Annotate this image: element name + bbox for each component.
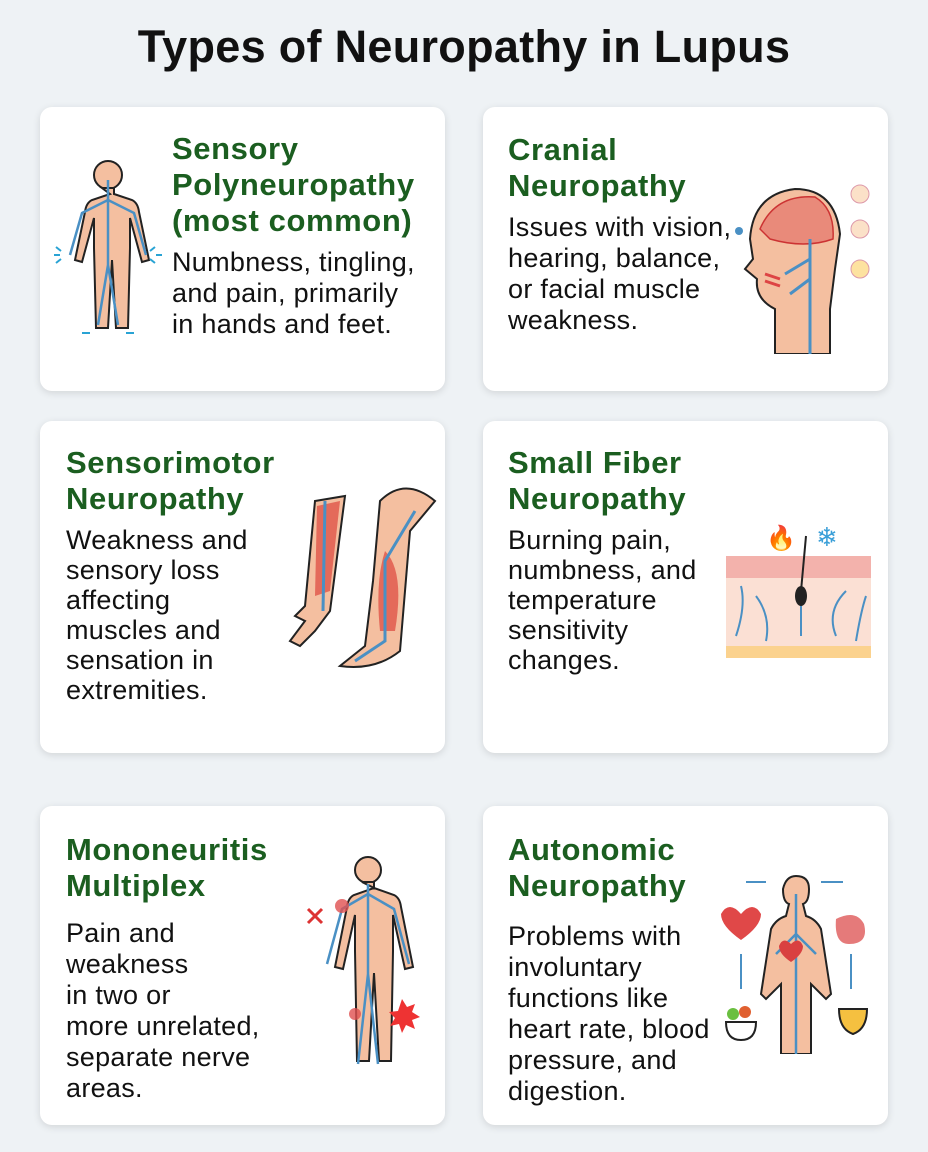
body text: and pain, primarily (172, 278, 398, 308)
body text: muscles and (66, 615, 221, 645)
body text (508, 525, 697, 675)
body text: sensitivity (508, 615, 628, 645)
body text (508, 921, 710, 1106)
heading: Sensory (172, 131, 299, 166)
body text: Issues with vision, (508, 212, 731, 242)
heading (508, 132, 686, 203)
heading: Multiplex (66, 868, 206, 903)
heading: Polyneuropathy (172, 167, 415, 202)
body text (66, 525, 248, 705)
heading (508, 445, 686, 516)
body text: involuntary (508, 952, 642, 982)
body text: sensation in (66, 645, 214, 675)
body text: in two or (66, 980, 171, 1010)
body text: Burning pain, (508, 525, 671, 555)
body text: temperature (508, 585, 657, 615)
panel: mononeuritis multiplex (40, 806, 445, 1125)
icon: skin cross-section: 🔥 (766, 524, 796, 552)
title: Types of Neuropathy in Lupus (138, 21, 790, 72)
body text: Weakness and (66, 525, 248, 555)
heading: Neuropathy (508, 868, 686, 903)
heading (508, 832, 686, 903)
body text: weakness. (508, 305, 638, 335)
heading (172, 131, 415, 238)
heading: Autonomic (508, 832, 675, 867)
body text: extremities. (66, 675, 208, 705)
heading: Neuropathy (66, 481, 244, 516)
body text: pressure, and (508, 1045, 677, 1075)
icon: arm and leg (288, 488, 436, 668)
body text: areas. (66, 1073, 143, 1103)
icon: human with nerve points (307, 856, 420, 1064)
body text: heart rate, blood (508, 1014, 710, 1044)
body text: sensory loss (66, 555, 220, 585)
icon: human with nerves (54, 160, 162, 334)
body text: separate nerve (66, 1042, 250, 1072)
icon: head with nerves (735, 184, 870, 354)
body text: digestion. (508, 1076, 627, 1106)
body text: numbness, and (508, 555, 697, 585)
body text: hearing, balance, (508, 243, 720, 273)
icon: skin cross-section: ❄ (816, 522, 838, 552)
body text: or facial muscle (508, 274, 700, 304)
heading (66, 832, 268, 903)
body text (66, 918, 260, 1103)
body text: Numbness, tingling, (172, 247, 415, 277)
panel: sensory polyneuropathy (40, 107, 445, 391)
heading: (most common) (172, 203, 412, 238)
body text: Problems with (508, 921, 681, 951)
heading: Mononeuritis (66, 832, 268, 867)
body text: changes. (508, 645, 620, 675)
heading: Neuropathy (508, 481, 686, 516)
body text (508, 212, 731, 335)
body text (172, 247, 415, 339)
body text: weakness (66, 949, 188, 979)
body text: functions like (508, 983, 668, 1013)
body text: affecting (66, 585, 170, 615)
heading: Sensorimotor (66, 445, 275, 480)
heading: Neuropathy (508, 168, 686, 203)
body text: more unrelated, (66, 1011, 260, 1041)
heading: Cranial (508, 132, 617, 167)
heading: Small Fiber (508, 445, 682, 480)
heading (66, 445, 275, 516)
panel: sensorimotor neuropathy (40, 421, 445, 753)
body text: in hands and feet. (172, 309, 392, 339)
body text: Pain and (66, 918, 175, 948)
panel: autonomic neuropathy (483, 806, 888, 1125)
panel: cranial neuropathy (483, 107, 888, 391)
panel: small fiber neuropathy (483, 421, 888, 753)
icon: body with organs (721, 875, 868, 1054)
icon: skin cross-section (726, 522, 871, 658)
